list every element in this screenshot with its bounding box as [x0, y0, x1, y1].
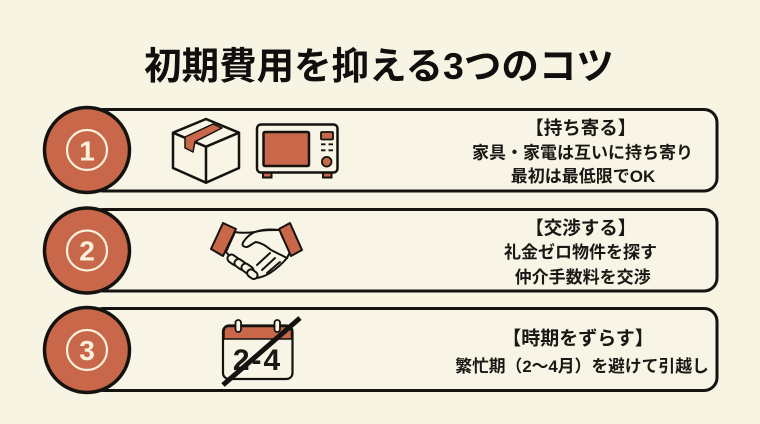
- text block: tip 1: 最初は最低限でOK: [511, 167, 656, 186]
- panel: tip 3: [44, 308, 717, 392]
- text block: tip 1: 【持ち寄る】: [525, 118, 636, 138]
- number badge 3: [44, 308, 130, 392]
- number badge 3: 3: [79, 335, 95, 366]
- text block: tip 2: 仲介手数料を交渉: [515, 267, 651, 287]
- number badge 2: 2: [79, 236, 95, 266]
- icon: cardboard box: [173, 119, 239, 183]
- text block: tip 2: [504, 218, 657, 287]
- number badge 1: [44, 108, 130, 192]
- text block: tip 3: [455, 328, 709, 376]
- text block: tip 3: 【時期をずらす】: [502, 328, 654, 350]
- text block: tip 1: 家具・家電は互いに持ち寄り: [472, 143, 693, 163]
- title: 初期費用を抑える3つのコツ: [144, 45, 614, 87]
- icon: calendar crossed out: 2-4: [233, 344, 282, 377]
- panel: tip 2: [44, 208, 717, 293]
- number badge 1: 1: [79, 136, 95, 166]
- icon: calendar crossed out: [223, 318, 300, 385]
- number badge 2: [44, 208, 130, 293]
- panel: tip 1: [44, 108, 717, 192]
- text block: tip 2: 【交渉する】: [525, 218, 636, 238]
- icon: microwave: [257, 124, 338, 178]
- text block: tip 3: 繁忙期（2～4月）を避けて引越し: [455, 356, 709, 376]
- text block: tip 2: 礼金ゼロ物件を探す: [504, 242, 657, 262]
- icon: handshake: [211, 223, 302, 280]
- text block: tip 1: [472, 118, 693, 186]
